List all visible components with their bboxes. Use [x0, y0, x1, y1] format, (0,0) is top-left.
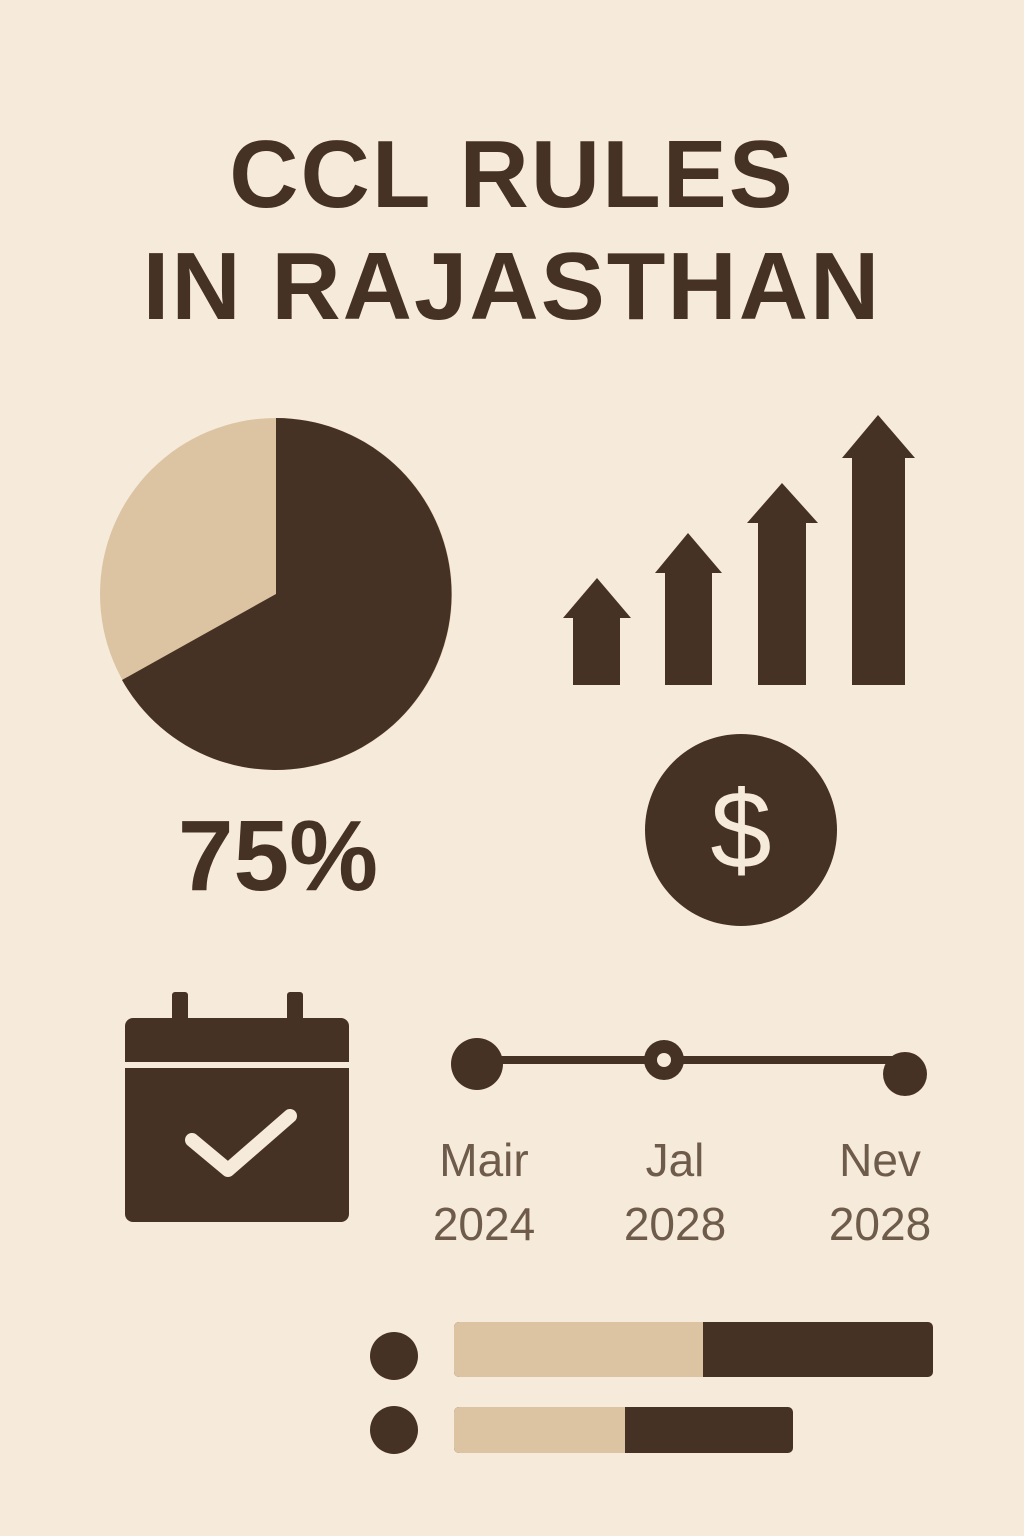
timeline labels: 2028: [829, 1198, 931, 1250]
progress bar 1: [370, 1322, 933, 1380]
title: IN RAJASTHAN: [143, 233, 881, 340]
icon: dollar coin: $: [710, 769, 772, 892]
percentage label: 75%: [178, 800, 378, 912]
icon: dollar coin: [645, 734, 837, 926]
title: [143, 121, 881, 340]
timeline labels: 2024: [433, 1198, 535, 1250]
timeline labels: Nev: [839, 1134, 921, 1186]
timeline labels: Mair: [439, 1134, 529, 1186]
progress bar 2: [370, 1406, 793, 1454]
timeline labels: [433, 1134, 931, 1250]
icon: calendar with check: [125, 992, 349, 1222]
title: CCL RULES: [229, 121, 795, 228]
timeline: [451, 1038, 927, 1096]
pie chart: [100, 418, 452, 770]
timeline labels: 2028: [624, 1198, 726, 1250]
timeline labels: Jal: [646, 1134, 704, 1186]
rising arrows chart: [563, 415, 915, 685]
